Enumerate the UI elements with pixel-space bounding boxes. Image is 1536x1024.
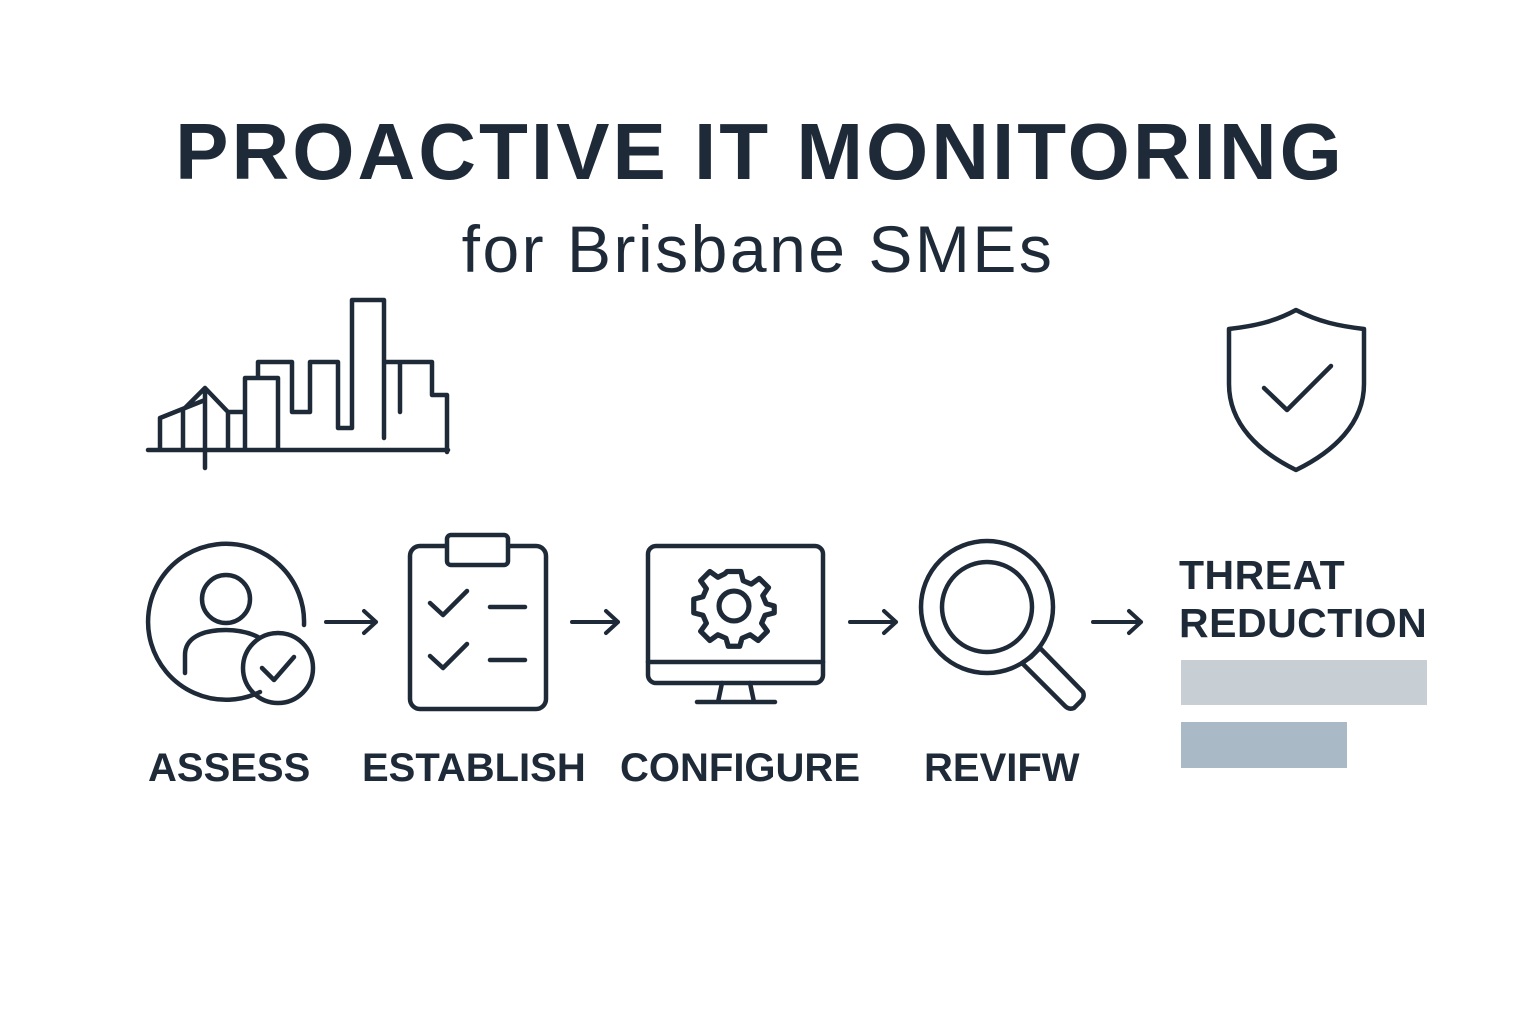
arrow 4 (1091, 608, 1144, 636)
label: assess: ASSESS (148, 746, 310, 790)
icon: magnifier (918, 538, 1086, 711)
arrow 3 (848, 608, 898, 636)
title: PROACTIVE IT MONITORING (175, 107, 1345, 196)
icon: monitor with gear (646, 544, 826, 704)
threat reduction text: REDUCTION (1179, 600, 1427, 646)
label: configure: CONFIGURE (620, 746, 860, 790)
label: establish: ESTABLISH (362, 746, 586, 790)
threat reduction text (1179, 552, 1427, 646)
subtitle: for Brisbane SMEs (462, 212, 1054, 286)
label: review: REVIFW (924, 746, 1080, 790)
icon: assess (146, 542, 316, 706)
bar 1 (1181, 660, 1427, 705)
arrow 2 (570, 608, 620, 636)
arrow 1 (324, 608, 378, 636)
icon: clipboard (408, 532, 548, 712)
icon: shield (1226, 308, 1366, 472)
threat reduction text: THREAT (1179, 552, 1345, 598)
bar 2 (1181, 722, 1347, 768)
